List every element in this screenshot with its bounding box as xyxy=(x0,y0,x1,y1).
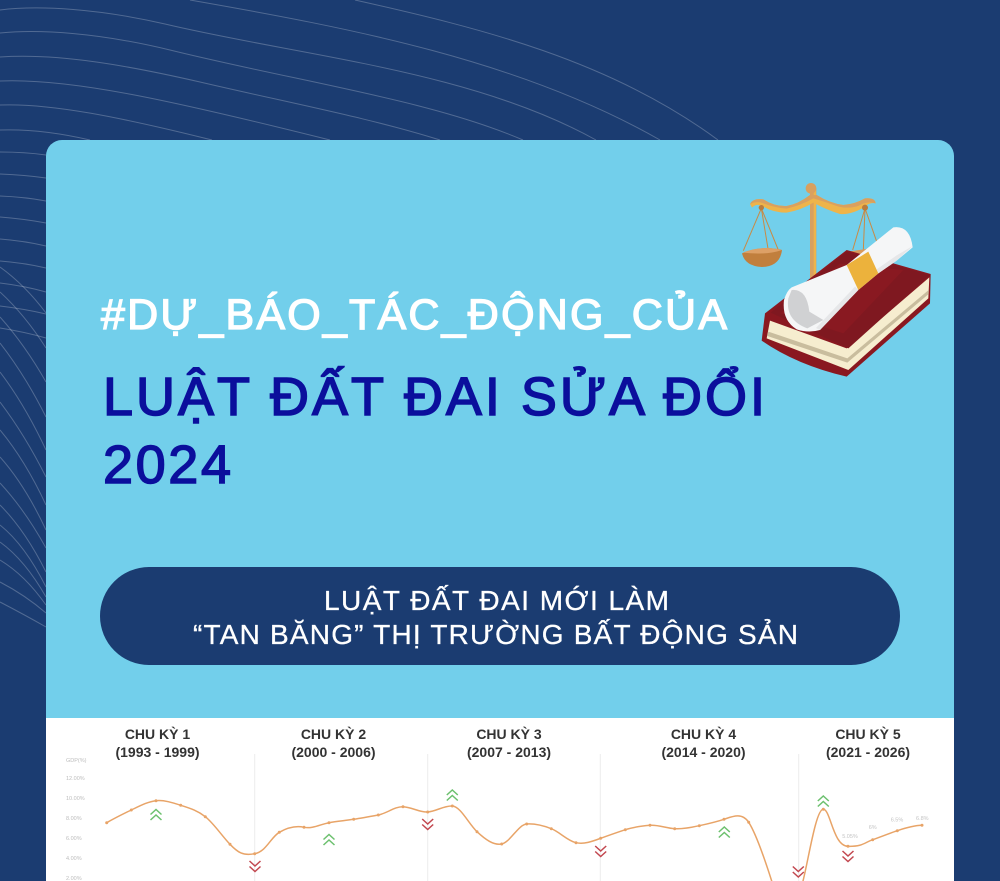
cycle headings: (2014 - 2020) xyxy=(661,744,746,760)
cycle headings: CHU KỲ 5 xyxy=(835,725,901,742)
chart axis labels: 6.00% xyxy=(66,836,82,842)
cycle headings: (2000 - 2006) xyxy=(291,744,376,760)
cycle headings: (2007 - 2013) xyxy=(467,744,551,760)
cycle headings: CHU KỲ 2 xyxy=(301,725,366,742)
forecast value labels: 6.8% xyxy=(916,816,929,822)
GDP line xyxy=(107,801,922,881)
cycle headings xyxy=(115,725,910,760)
cycle headings: CHU KỲ 3 xyxy=(476,725,542,742)
chart axis labels: GDP(%) xyxy=(66,758,87,764)
forecast value labels: 6% xyxy=(869,825,877,831)
forecast value labels: 5.05% xyxy=(842,834,858,840)
chart axis labels: 10.00% xyxy=(66,796,85,802)
forecast value labels: 6.5% xyxy=(891,818,903,824)
heading: title xyxy=(103,367,765,495)
icon: scales, book and scroll xyxy=(742,183,931,377)
cycle headings: (2021 - 2026) xyxy=(826,744,910,760)
heading: hashtag: #DỰ_BÁO_TÁC_ĐỘNG_CỦA xyxy=(101,290,727,339)
panel: main card xyxy=(46,140,954,881)
red down chevrons xyxy=(250,819,854,877)
cycle headings: CHU KỲ 4 xyxy=(671,725,736,742)
callout pill: “TAN BĂNG” THỊ TRƯỜNG BẤT ĐỘNG SẢN xyxy=(193,618,798,650)
panel: GDP chart xyxy=(46,718,954,881)
chart axis labels: 12.00% xyxy=(66,776,85,782)
heading: title: LUẬT ĐẤT ĐAI SỬA ĐỔI xyxy=(103,367,765,427)
cycle headings: (1993 - 1999) xyxy=(115,744,200,760)
chart axis labels: 4.00% xyxy=(66,856,82,862)
cycle headings: CHU KỲ 1 xyxy=(125,725,190,742)
data points xyxy=(105,799,923,855)
heading: title: 2024 xyxy=(103,435,231,495)
chart axis labels: 8.00% xyxy=(66,816,82,822)
chart axis labels xyxy=(66,758,87,881)
forecast value labels xyxy=(842,816,929,840)
callout pill: LUẬT ĐẤT ĐAI MỚI LÀM xyxy=(324,585,669,616)
callout pill xyxy=(100,567,900,665)
green up chevrons xyxy=(150,790,829,845)
